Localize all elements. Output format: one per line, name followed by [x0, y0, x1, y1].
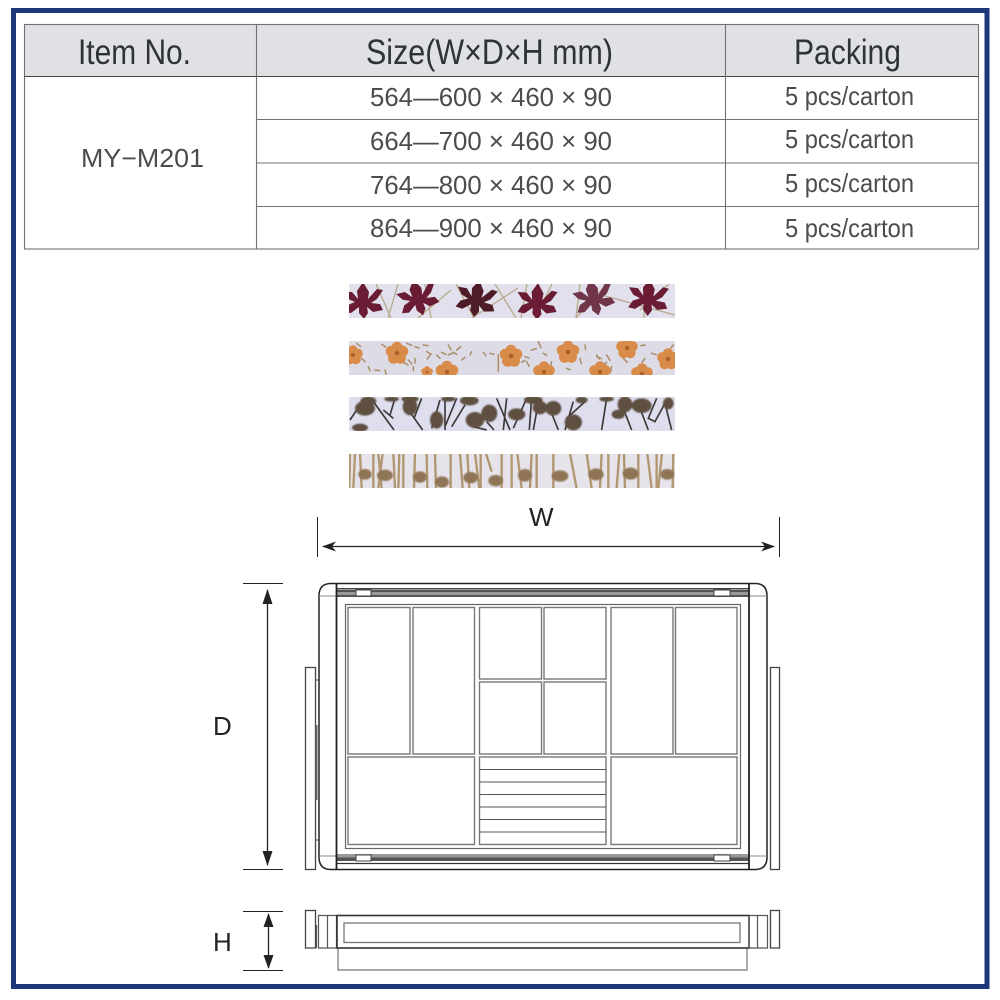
- size row 1: 564—600 × 460 × 90: [370, 82, 612, 112]
- compartments middle: [480, 608, 606, 754]
- left end cap: [316, 916, 336, 948]
- drawer top view: [306, 584, 780, 870]
- size row 4: 864—900 × 460 × 90: [370, 213, 612, 243]
- specification table: [24, 24, 978, 249]
- right end cap: [749, 916, 768, 948]
- W arrow: [323, 546, 774, 548]
- right side bracket: [770, 668, 780, 870]
- pattern strip: tan stems with seed heads: [349, 453, 675, 488]
- drawer side view: [306, 910, 780, 970]
- main body: [337, 916, 749, 948]
- dimension W: [318, 502, 780, 557]
- striped compartment: [480, 757, 606, 844]
- packing row 4: 5 pcs/carton: [785, 213, 914, 243]
- table grid: [24, 24, 978, 249]
- header: item number: Item No.: [78, 33, 191, 72]
- compartments right: [611, 608, 737, 844]
- packing row 3: 5 pcs/carton: [785, 168, 914, 198]
- left side bracket: [306, 668, 319, 870]
- lower basket outline: [338, 948, 747, 970]
- vertical body lines: [336, 584, 749, 869]
- W label: W: [529, 502, 554, 532]
- bottom rail: [337, 854, 749, 864]
- pattern strip: dark dried branches: [349, 396, 675, 432]
- header: size: Size(W×D×H mm): [366, 33, 613, 72]
- corner cap lines: [319, 596, 767, 856]
- left end block: [306, 910, 316, 948]
- pattern strip: orange flowers: [349, 341, 675, 375]
- tray frame: [346, 604, 740, 848]
- dimension D: [213, 584, 283, 870]
- D extension lines: [243, 584, 283, 870]
- pattern strip: maple leaves: [349, 284, 675, 318]
- item number value: MY−M201: [81, 143, 204, 173]
- size row 2: 664—700 × 460 × 90: [370, 126, 612, 156]
- H label: H: [213, 927, 232, 957]
- compartments left: [348, 608, 474, 844]
- header: packing: Packing: [794, 33, 901, 72]
- table header background: [24, 24, 978, 76]
- dimension H: [213, 912, 283, 970]
- H extension lines: [243, 912, 283, 970]
- D label: D: [213, 711, 232, 741]
- W extension lines: [318, 517, 780, 557]
- right end block: [770, 910, 780, 948]
- outer body: [319, 584, 767, 870]
- size row 3: 764—800 × 460 × 90: [370, 170, 612, 200]
- H arrow: [268, 914, 270, 968]
- body inner panel: [344, 923, 740, 942]
- packing row 2: 5 pcs/carton: [785, 124, 914, 154]
- packing row 1: 5 pcs/carton: [785, 81, 914, 111]
- D arrow: [266, 590, 268, 865]
- top rail: [337, 588, 749, 597]
